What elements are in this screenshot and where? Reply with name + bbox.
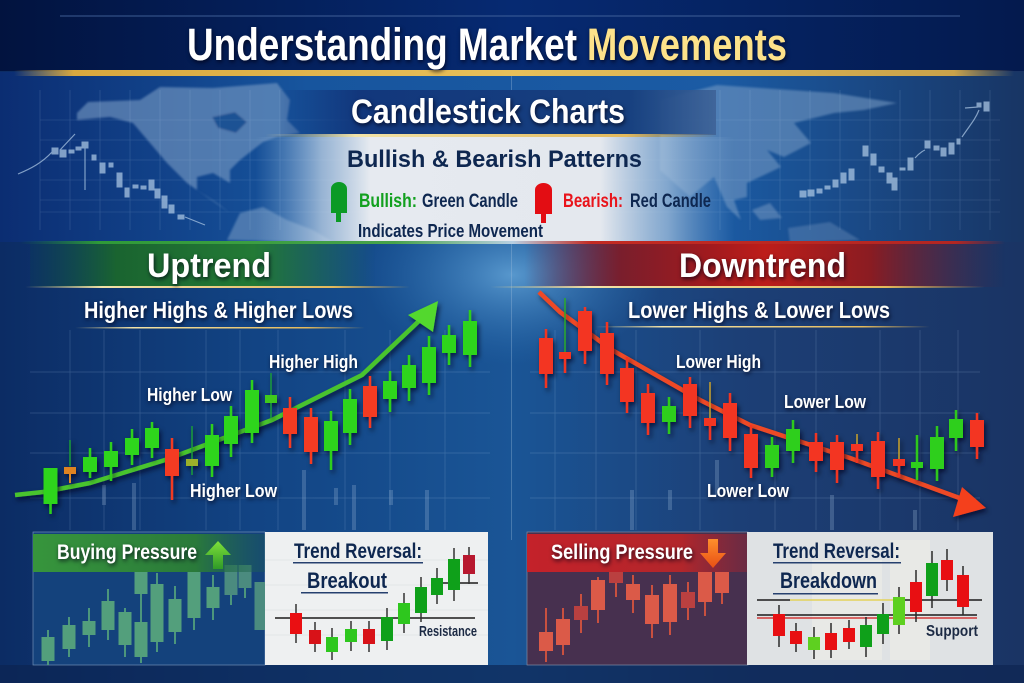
faded green candles — [48, 565, 261, 665]
icon: up arrow — [205, 541, 231, 569]
panel: downtrend — [490, 244, 1005, 517]
arrow: uptrend line — [15, 301, 438, 495]
breakout candlesticks — [296, 547, 469, 660]
grid overlay: trend panels — [30, 330, 980, 530]
title rule — [14, 70, 1014, 76]
resistance label: Resistance — [419, 623, 477, 640]
breakout heading — [293, 540, 423, 594]
bullish label: Green Candle — [422, 191, 518, 212]
top band — [0, 0, 1024, 71]
faint chart ghosts — [104, 460, 915, 530]
bearish label: Red Candle — [630, 191, 711, 212]
panel: trend reversal breakdown — [747, 532, 993, 665]
selling pressure header: Selling Pressure — [551, 541, 693, 564]
label: higher high: Higher High — [269, 352, 358, 372]
caption: Indicates Price Movement — [358, 221, 543, 241]
label: lower low lower: Lower Low — [707, 481, 790, 501]
panel: uptrend — [15, 244, 470, 514]
support label: Support — [926, 623, 979, 640]
breakdown heading: Trend Reversal: — [773, 540, 900, 563]
label: higher low lower: Higher Low — [190, 481, 278, 501]
intro panel glow — [255, 137, 735, 242]
uptrend candlesticks — [50, 310, 470, 514]
panel: candlestick intro — [255, 90, 735, 242]
title: Understanding Market — [187, 19, 577, 70]
panel: trend reversal breakout — [265, 532, 488, 665]
breakdown heading — [773, 540, 901, 594]
support lines — [757, 600, 982, 618]
faint chart: world map right — [800, 102, 989, 197]
bearish label: Bearish: — [563, 191, 623, 212]
title: Movements — [587, 19, 787, 70]
uptrend banner — [25, 244, 410, 288]
selling pressure header — [527, 534, 748, 572]
buying pressure header: Buying Pressure — [57, 541, 197, 564]
resistance line — [275, 583, 478, 618]
icon: green candle — [331, 182, 347, 222]
buying pressure header — [33, 534, 265, 572]
label: lower low upper: Lower Low — [784, 392, 867, 412]
world map background — [77, 83, 897, 243]
uptrend subheading: Higher Highs & Higher Lows — [84, 297, 353, 323]
uptrend banner: Uptrend — [147, 247, 271, 285]
arrow: downtrend line — [539, 292, 986, 517]
header bar: candlestick charts — [265, 90, 717, 137]
grid overlay: upper map — [40, 90, 1000, 230]
breakdown candlesticks — [779, 549, 963, 659]
downtrend banner: Downtrend — [679, 247, 846, 285]
icon: red candle — [535, 183, 552, 223]
breakout heading: Breakout — [307, 568, 388, 593]
bullish label: Bullish: — [359, 191, 417, 212]
divider strip — [20, 241, 1005, 244]
label: higher low upper: Higher Low — [147, 385, 233, 405]
downtrend subheading: Lower Highs & Lower Lows — [628, 297, 890, 323]
faded red candles — [546, 572, 722, 662]
downtrend candlesticks — [546, 298, 977, 489]
panel: buying pressure — [33, 532, 265, 665]
faint chart: world map left — [18, 134, 205, 225]
breakdown heading: Breakdown — [780, 568, 877, 593]
panel: selling pressure — [527, 532, 748, 665]
subheading: Bullish & Bearish Patterns — [347, 146, 642, 173]
label: lower high: Lower High — [676, 352, 761, 372]
downtrend banner — [490, 244, 1005, 288]
breakout heading: Trend Reversal: — [294, 540, 422, 563]
header bar: candlestick charts: Candlestick Charts — [351, 93, 625, 131]
icon: down arrow — [700, 539, 726, 568]
